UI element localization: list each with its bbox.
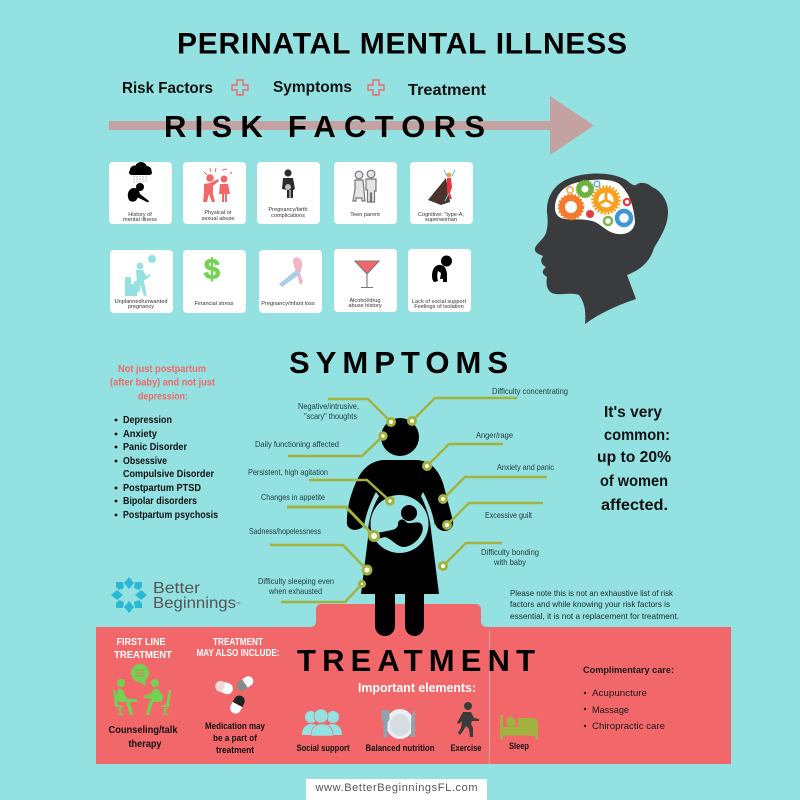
list: conditions: Compulsive Disorder bbox=[123, 469, 214, 480]
card: lack of social support: Lack of social support bbox=[412, 299, 466, 305]
subtitle row: Symptoms bbox=[273, 79, 352, 96]
subtitle row bbox=[122, 79, 486, 99]
callout: anger/rage bbox=[424, 431, 513, 470]
panel: first line treatment: Counseling/talk bbox=[108, 725, 178, 736]
card: unplanned pregnancy: Unplanned/unwanted bbox=[115, 299, 167, 305]
item: sleep: Sleep bbox=[509, 741, 529, 751]
callout: sadness: Sadness/hopelessness bbox=[249, 527, 321, 536]
item: exercise: Exercise bbox=[450, 743, 482, 753]
panel: first line treatment: FIRST LINE bbox=[116, 637, 166, 648]
callout: difficulty sleeping bbox=[258, 577, 365, 602]
text block: note: factors and while knowing your risk factors is bbox=[510, 599, 670, 609]
icon: counseling bbox=[113, 664, 171, 715]
callout: daily functioning: Daily functioning affected bbox=[255, 440, 339, 449]
callout: very common statistic: of women bbox=[600, 473, 668, 490]
callout: negative thoughts: "scary" thoughts bbox=[304, 412, 357, 421]
heading: treatment: TREATMENT bbox=[297, 643, 535, 678]
callout: difficulty sleeping: when exhausted bbox=[268, 587, 322, 596]
card: history of mental illness: History of bbox=[128, 212, 152, 218]
callout: persistent agitation: Persistent, high agitation bbox=[248, 468, 328, 477]
card: financial stress: $ bbox=[204, 254, 220, 286]
callout: excessive guilt bbox=[444, 503, 543, 528]
panel: treatment may also include: MAY ALSO INCLUDE: bbox=[196, 648, 280, 659]
card: pregnancy/infant loss: Pregnancy/infant loss bbox=[261, 301, 315, 307]
list: conditions: Depression bbox=[123, 415, 172, 426]
head with gears illustration bbox=[535, 174, 668, 324]
item: social support bbox=[296, 709, 350, 753]
panel: risk factor cards bbox=[109, 162, 473, 313]
item: exercise bbox=[450, 702, 482, 753]
callout: very common statistic: It's very bbox=[604, 404, 662, 421]
card: pregnancy/birth complications: Pregnancy/birth bbox=[268, 207, 308, 213]
item: sleep bbox=[500, 715, 538, 751]
panel: treatment may also include: be a part of bbox=[213, 733, 258, 743]
panel: complimentary care bbox=[583, 665, 674, 732]
footer website bbox=[306, 779, 487, 800]
card: cognitive type-A superwoman: superwoman bbox=[425, 217, 457, 223]
card: physical or sexual abuse: sexual abuse bbox=[202, 216, 234, 222]
callout: anxiety and panic bbox=[440, 463, 554, 502]
callout: very common statistic: common: bbox=[604, 427, 670, 444]
panel: treatment may also include: treatment bbox=[216, 745, 254, 755]
subtitle row: Treatment bbox=[408, 82, 486, 99]
card: cognitive type-A superwoman: Cognitive: "type-A; bbox=[418, 212, 465, 218]
card: pregnancy/birth complications bbox=[257, 162, 320, 224]
callout: difficulty concentrating bbox=[408, 387, 568, 424]
divider bbox=[488, 630, 490, 764]
logo: Better Beginnings bbox=[111, 577, 241, 613]
arrow bbox=[109, 96, 594, 155]
card: history of mental illness bbox=[109, 162, 172, 224]
list: conditions: Postpartum psychosis bbox=[123, 510, 218, 521]
text block: note: Please note this is not an exhaustive list of risk bbox=[510, 588, 674, 598]
callout: sadness bbox=[249, 527, 371, 574]
list: conditions: Bipolar disorders bbox=[123, 496, 197, 507]
item: balanced nutrition: Balanced nutrition bbox=[366, 743, 434, 753]
text block: not just postpartum: (after baby) and not just bbox=[110, 378, 216, 388]
callout: difficulty concentrating: Difficulty concentrating bbox=[492, 387, 568, 396]
subtitle row: Risk Factors bbox=[122, 80, 213, 97]
card: history of mental illness: mental illness bbox=[123, 217, 157, 223]
text block: note: essential, it is not a replacement for treatment. bbox=[510, 611, 679, 621]
card: alcohol/drug abuse history: Alcohol/drug bbox=[349, 298, 381, 304]
text block: not just postpartum: depression: bbox=[138, 392, 188, 402]
panel: treatment background bbox=[96, 604, 731, 764]
logo: Better Beginnings: Beginnings bbox=[153, 595, 236, 612]
heading: risk factors: RISK FACTORS bbox=[164, 109, 485, 144]
icon: pills bbox=[214, 674, 255, 715]
card: financial stress: Financial stress bbox=[195, 301, 234, 307]
panel: first line treatment bbox=[108, 637, 178, 750]
panel: complimentary care: Acupuncture bbox=[592, 688, 647, 699]
footer website: www.BetterBeginningsFL.com bbox=[314, 782, 478, 794]
card: teen parent: Teen parent bbox=[350, 212, 380, 218]
logo: Better Beginnings: TM bbox=[236, 601, 241, 605]
panel: treatment may also include: TREATMENT bbox=[213, 637, 263, 648]
item: balanced nutrition bbox=[366, 709, 434, 753]
heading: important elements: Important elements: bbox=[358, 681, 476, 695]
card: physical or sexual abuse bbox=[183, 162, 246, 224]
panel: treatment may also include bbox=[196, 637, 280, 755]
text block: not just postpartum bbox=[110, 364, 216, 402]
callout: very common statistic: up to 20% bbox=[597, 449, 671, 466]
list: conditions: Postpartum PTSD bbox=[123, 483, 201, 494]
panel: complimentary care: Massage bbox=[592, 705, 629, 716]
text block: note bbox=[510, 588, 679, 621]
card: lack of social support bbox=[408, 249, 471, 312]
panel: first line treatment: TREATMENT bbox=[114, 650, 172, 661]
card: unplanned pregnancy: pregnancy bbox=[128, 304, 154, 310]
callout: daily functioning bbox=[255, 433, 386, 456]
symptom callouts bbox=[248, 387, 568, 602]
callout: very common statistic: affected. bbox=[601, 497, 668, 514]
card: pregnancy/birth complications: complications bbox=[271, 213, 305, 219]
callout: negative thoughts: Negative/intrusive, bbox=[298, 402, 359, 411]
callout: difficulty bonding: with baby bbox=[493, 558, 527, 567]
callout: excessive guilt: Excessive guilt bbox=[485, 511, 533, 520]
callout: very common statistic bbox=[597, 404, 671, 514]
list: conditions bbox=[115, 415, 218, 521]
callout: negative thoughts bbox=[298, 399, 394, 426]
logo: Better Beginnings: Better bbox=[153, 580, 201, 597]
panel: treatment may also include: Medication may bbox=[205, 721, 265, 731]
card: financial stress bbox=[183, 250, 246, 313]
title: PERINATAL MENTAL ILLNESS bbox=[177, 28, 627, 60]
list: conditions: Panic Disorder bbox=[123, 442, 187, 453]
heading: symptoms: SYMPTOMS bbox=[289, 345, 508, 380]
callout: anger/rage: Anger/rage bbox=[476, 431, 513, 440]
card: physical or sexual abuse: Physical or bbox=[204, 210, 232, 216]
card: lack of social support: Feelings of isolation bbox=[414, 304, 464, 310]
card: alcohol/drug abuse history bbox=[334, 249, 397, 312]
text block: not just postpartum: Not just postpartum bbox=[118, 364, 206, 375]
card: pregnancy/infant loss bbox=[259, 250, 322, 313]
panel: complimentary care: Complimentary care: bbox=[583, 665, 674, 676]
list: conditions: Anxiety bbox=[123, 429, 157, 440]
callout: difficulty bonding: Difficulty bonding bbox=[481, 548, 539, 557]
card: alcohol/drug abuse history: abuse history bbox=[348, 303, 382, 309]
callout: persistent agitation bbox=[248, 468, 393, 504]
callout: difficulty sleeping: Difficulty sleeping even bbox=[258, 577, 334, 586]
callout: difficulty bonding bbox=[440, 543, 539, 570]
pregnant figure bbox=[347, 418, 453, 636]
list: conditions: Obsessive bbox=[123, 456, 167, 467]
panel: complimentary care: Chiropractic care bbox=[592, 721, 665, 732]
card: unplanned pregnancy bbox=[110, 250, 173, 313]
item: social support: Social support bbox=[296, 743, 350, 753]
panel: first line treatment: therapy bbox=[128, 739, 162, 750]
callout: anxiety and panic: Anxiety and panic bbox=[497, 463, 554, 472]
card: cognitive type-A superwoman bbox=[410, 162, 473, 224]
callout: changes in appetite: Changes in appetite bbox=[261, 493, 325, 502]
callout: changes in appetite bbox=[261, 493, 378, 540]
card: teen parent bbox=[334, 162, 397, 224]
